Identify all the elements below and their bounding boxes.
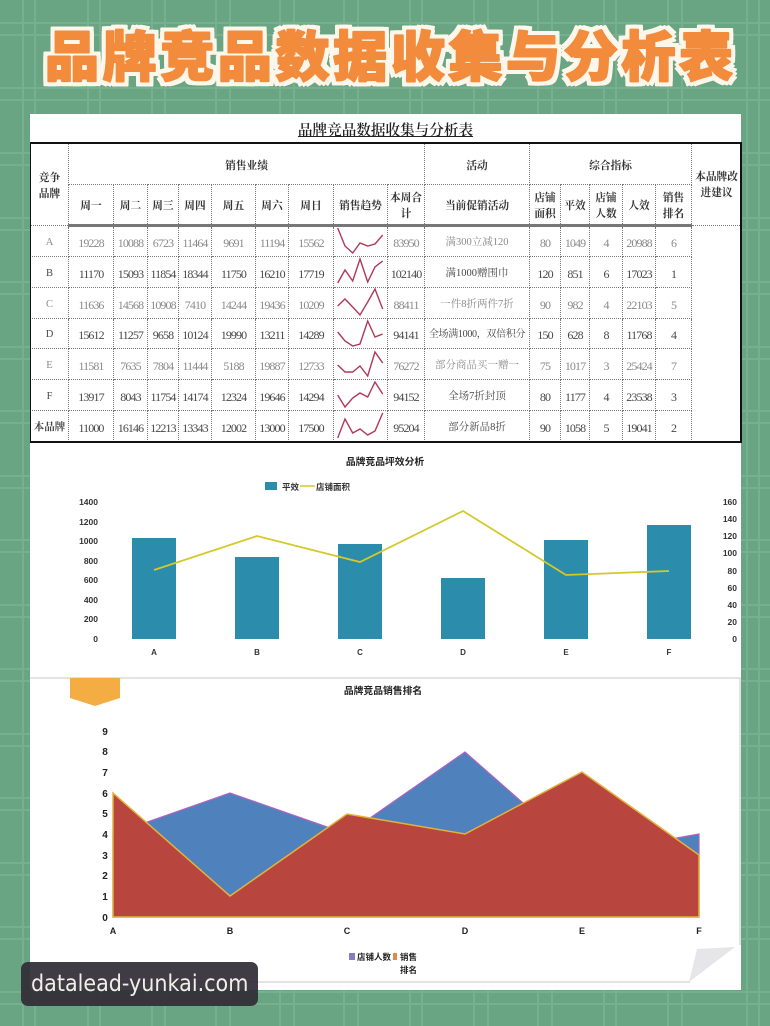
data table: 部分新品8折 xyxy=(448,422,506,432)
data table: 一件8折两件7折 xyxy=(440,298,514,310)
data table: 排名 xyxy=(663,208,684,220)
legend: 排名 xyxy=(400,965,417,975)
right axis labels: 60 xyxy=(728,583,737,593)
data table: 部分商品买一赠一 xyxy=(435,360,519,370)
data table: 14289 xyxy=(298,328,324,342)
data table: 17023 xyxy=(626,266,652,280)
legend: 销售 xyxy=(400,952,417,962)
data table: 周二 xyxy=(120,200,141,212)
data table: 本周合计 xyxy=(390,192,422,220)
watermark: datalead-yunkai.com xyxy=(31,971,248,997)
y axis labels: 1 xyxy=(102,892,108,903)
data table: 11754 xyxy=(150,390,176,404)
data table: 75 xyxy=(540,358,550,372)
data table: 20988 xyxy=(626,236,652,250)
data table: 8 xyxy=(603,328,609,342)
data table: 12213 xyxy=(150,420,176,434)
data table: 16146 xyxy=(118,420,143,434)
data table: 16210 xyxy=(259,266,285,280)
data table: 13343 xyxy=(182,420,208,434)
data table: 102140 xyxy=(391,266,421,280)
data table: 19990 xyxy=(221,328,246,342)
data table: 平效 xyxy=(564,200,586,212)
chart title: 品牌竞品销售排名 xyxy=(344,684,422,697)
y axis labels: 4 xyxy=(102,830,108,841)
data table xyxy=(31,144,740,440)
area: sales rank xyxy=(113,772,699,917)
data table: 80 xyxy=(540,236,550,250)
data table: 17719 xyxy=(298,266,324,280)
data table: 6 xyxy=(603,266,609,280)
data table: 94141 xyxy=(393,328,419,342)
data table: 11170 xyxy=(79,266,103,280)
data table: 4 xyxy=(603,390,609,404)
data table: 12324 xyxy=(221,390,246,404)
data table: 14244 xyxy=(221,298,246,312)
legend: 店铺面积 xyxy=(316,482,351,492)
data table: 80 xyxy=(540,390,550,404)
data table: 9691 xyxy=(223,236,244,250)
left axis labels: 1400 xyxy=(79,497,98,507)
data table: 10088 xyxy=(118,236,143,250)
left axis labels: 0 xyxy=(93,634,98,644)
data table: 周一 xyxy=(80,200,102,212)
sales trend sparklines xyxy=(337,228,384,438)
data table: 满1000赠围巾 xyxy=(446,268,509,278)
data table: 22103 xyxy=(626,298,652,312)
data table: 19887 xyxy=(259,358,285,372)
bar chart: 品牌竞品坪效分析 xyxy=(79,455,737,657)
data table: 11464 xyxy=(182,236,208,250)
data table: 90 xyxy=(540,298,550,312)
data table: 周六 xyxy=(261,200,283,212)
data table: 周五 xyxy=(223,200,244,212)
data table: 3 xyxy=(671,390,676,404)
data table: 90 xyxy=(540,420,550,434)
data table: 活动 xyxy=(466,160,488,172)
data table: 11854 xyxy=(150,266,176,280)
data table: 982 xyxy=(567,298,583,312)
data table: 11000 xyxy=(78,420,104,434)
legend xyxy=(349,952,417,975)
left axis labels: 800 xyxy=(84,556,98,566)
table outer border xyxy=(30,142,742,443)
orange ribbon xyxy=(70,678,120,706)
data table: 17500 xyxy=(298,420,324,434)
data table: 1017 xyxy=(565,358,585,372)
right axis labels xyxy=(723,497,737,644)
area chart: 品牌竞品销售排名 xyxy=(30,677,741,983)
data table: 满300立减120 xyxy=(446,237,509,248)
data table: 2 xyxy=(671,420,676,434)
data table: 88411 xyxy=(393,298,419,312)
category labels: F xyxy=(667,648,672,657)
x axis labels: C xyxy=(344,926,351,936)
data table: 1058 xyxy=(565,420,585,434)
sheet title: 品牌竞品数据收集与分析表 xyxy=(298,123,473,139)
data table: 销售趋势 xyxy=(339,200,382,212)
data table: 11257 xyxy=(118,328,143,342)
x axis labels: B xyxy=(227,926,234,936)
data table: 竞争 xyxy=(39,172,60,184)
data table: 6 xyxy=(671,236,676,250)
page curl xyxy=(689,947,735,982)
data table: 面积 xyxy=(534,208,556,220)
data table: 本品牌 xyxy=(34,422,65,432)
data table: 13211 xyxy=(259,328,285,342)
data table: 6723 xyxy=(153,236,173,250)
right axis labels: 160 xyxy=(723,497,737,507)
data table: 19646 xyxy=(259,390,285,404)
y axis labels: 3 xyxy=(102,851,108,862)
data table: 14174 xyxy=(182,390,208,404)
category labels: E xyxy=(563,648,569,657)
panel: white sheet xyxy=(30,114,741,990)
data table: 851 xyxy=(567,266,583,280)
y axis labels: 5 xyxy=(102,809,108,820)
data table: 周三 xyxy=(152,200,174,212)
right axis labels: 100 xyxy=(723,548,737,558)
legend xyxy=(265,482,351,492)
data table: 店铺 xyxy=(534,192,556,204)
data table: F xyxy=(47,390,52,402)
bars xyxy=(132,525,691,639)
area: store staff xyxy=(113,752,699,917)
x axis labels: E xyxy=(579,926,585,936)
data table: 83950 xyxy=(393,236,419,250)
data table: 5 xyxy=(603,420,609,434)
category labels: A xyxy=(151,648,157,657)
data table: 120 xyxy=(537,266,553,280)
data table: D xyxy=(46,329,53,340)
data table: 店铺 xyxy=(595,192,617,204)
data table: 76272 xyxy=(393,358,419,372)
data table: 本品牌改进建议 xyxy=(695,170,738,198)
title: 品牌竞品数据收集与分析表 xyxy=(45,13,733,92)
data table: 3 xyxy=(603,358,609,372)
data table: 19228 xyxy=(78,236,104,250)
y axis labels: 7 xyxy=(102,768,108,779)
data table: 23538 xyxy=(626,390,652,404)
category labels: D xyxy=(460,648,466,657)
data table: 14294 xyxy=(298,390,324,404)
right axis labels: 20 xyxy=(728,617,737,627)
data table: 7635 xyxy=(120,358,141,372)
data table: 5 xyxy=(671,298,676,312)
data table: 12002 xyxy=(221,420,246,434)
data table: 当前促销活动 xyxy=(445,200,509,212)
x axis labels: D xyxy=(462,926,469,936)
data table: 628 xyxy=(567,328,583,342)
data table: 95204 xyxy=(393,420,419,434)
left axis labels: 200 xyxy=(84,614,98,624)
data table: 1 xyxy=(671,266,676,280)
data table: 10209 xyxy=(298,298,324,312)
data table: 11750 xyxy=(221,266,246,280)
data table: 15612 xyxy=(78,328,104,342)
data table: 7410 xyxy=(185,298,205,312)
data table: 19041 xyxy=(626,420,652,434)
legend: 店铺人数 xyxy=(357,952,392,962)
data table: 品牌 xyxy=(39,188,60,200)
left axis labels: 400 xyxy=(84,595,98,605)
data table: B xyxy=(46,268,53,278)
data table: 94152 xyxy=(393,390,419,404)
data table: 15562 xyxy=(298,236,324,250)
left axis labels xyxy=(79,497,98,644)
data table: 人数 xyxy=(595,208,617,220)
data table: 11581 xyxy=(78,358,104,372)
right axis labels: 40 xyxy=(728,600,737,610)
data table: 5188 xyxy=(223,358,244,372)
data table: 12733 xyxy=(298,358,324,372)
category labels: B xyxy=(254,648,260,657)
category labels: C xyxy=(357,648,363,657)
data table: 4 xyxy=(603,236,609,250)
data table: 全场满1000，双倍积分 xyxy=(429,329,525,340)
left axis labels: 1200 xyxy=(79,517,98,527)
data table: 4 xyxy=(603,298,609,312)
data table: 19436 xyxy=(259,298,285,312)
data table: 人效 xyxy=(628,200,650,212)
right axis labels: 80 xyxy=(728,566,737,576)
data table: E xyxy=(46,360,53,370)
chart title: 品牌竞品坪效分析 xyxy=(346,455,424,468)
data table: 13917 xyxy=(78,390,104,404)
y axis labels xyxy=(102,727,108,924)
y axis labels: 9 xyxy=(102,727,108,738)
y axis labels: 0 xyxy=(102,913,108,924)
data table: 11636 xyxy=(78,298,104,312)
left axis labels: 600 xyxy=(84,575,98,585)
x axis labels: F xyxy=(696,926,702,936)
data table: 7 xyxy=(671,358,676,372)
data table: 11768 xyxy=(626,328,652,342)
data table: 11444 xyxy=(182,358,208,372)
x axis labels: A xyxy=(110,926,117,936)
data table: 销售业绩 xyxy=(225,160,268,172)
data table: 周四 xyxy=(184,200,206,212)
data table: 8043 xyxy=(120,390,141,404)
data table: 周日 xyxy=(300,200,322,212)
data table: 25424 xyxy=(626,358,652,372)
data table: 150 xyxy=(537,328,553,342)
data table: 7804 xyxy=(153,358,173,372)
data table: 1049 xyxy=(565,236,585,250)
data table: 4 xyxy=(671,328,676,342)
data table: 18344 xyxy=(182,266,208,280)
right axis labels: 140 xyxy=(723,514,737,524)
watermark xyxy=(21,962,258,1006)
line: store area xyxy=(154,511,669,575)
x axis labels xyxy=(110,926,702,936)
y axis labels: 8 xyxy=(102,747,108,758)
legend: 平效 xyxy=(282,482,300,492)
data table: 14568 xyxy=(118,298,143,312)
data table: 10124 xyxy=(182,328,208,342)
chart frame xyxy=(30,678,740,982)
left axis labels: 1000 xyxy=(79,536,98,546)
data table: C xyxy=(46,298,53,310)
data table: 综合指标 xyxy=(589,160,632,172)
data table: 15093 xyxy=(118,266,143,280)
y axis labels: 6 xyxy=(102,789,108,800)
data table: 11194 xyxy=(260,236,284,250)
data table: 销售 xyxy=(663,192,684,204)
right axis labels: 0 xyxy=(732,634,737,644)
data table: A xyxy=(46,236,53,248)
right axis labels: 120 xyxy=(723,531,737,541)
y axis labels: 2 xyxy=(102,871,108,882)
data table: 1177 xyxy=(565,390,585,404)
data table: 9658 xyxy=(153,328,173,342)
data table: 全场7折封顶 xyxy=(448,390,506,402)
category labels xyxy=(151,648,672,657)
data table: 13000 xyxy=(259,420,285,434)
data table: 10908 xyxy=(150,298,176,312)
